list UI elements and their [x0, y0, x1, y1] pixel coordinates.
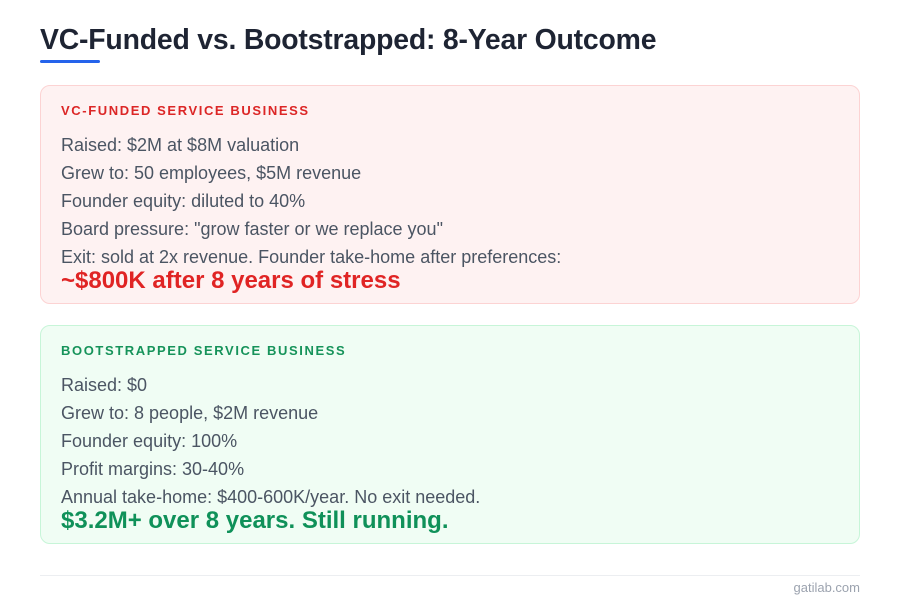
details list: Raised: $2M at $8M valuation — [61, 135, 299, 155]
details list — [61, 135, 561, 267]
details list: Raised: $0 — [61, 375, 147, 395]
details list: Annual take-home: $400-600K/year. No exit needed. — [61, 487, 480, 507]
details list — [61, 375, 480, 507]
outcome: ~$800K after 8 years of stress — [61, 267, 401, 294]
details list: Grew to: 8 people, $2M revenue — [61, 403, 318, 423]
panel heading: BOOTSTRAPPED SERVICE BUSINESS — [61, 343, 346, 358]
details list: Founder equity: 100% — [61, 431, 237, 451]
details list: Founder equity: diluted to 40% — [61, 191, 305, 211]
source credit: gatilab.com — [794, 580, 860, 595]
details list: Board pressure: "grow faster or we replace you" — [61, 219, 443, 239]
panel heading: VC-FUNDED SERVICE BUSINESS — [61, 103, 310, 118]
outcome: $3.2M+ over 8 years. Still running. — [61, 507, 448, 534]
details list: Exit: sold at 2x revenue. Founder take-home after preferences: — [61, 247, 561, 267]
details list: Profit margins: 30-40% — [61, 459, 244, 479]
panel: vc-funded — [40, 85, 860, 304]
title: VC-Funded vs. Bootstrapped: 8-Year Outcome — [40, 24, 656, 56]
panel: bootstrapped — [40, 325, 860, 544]
details list: Grew to: 50 employees, $5M revenue — [61, 163, 361, 183]
